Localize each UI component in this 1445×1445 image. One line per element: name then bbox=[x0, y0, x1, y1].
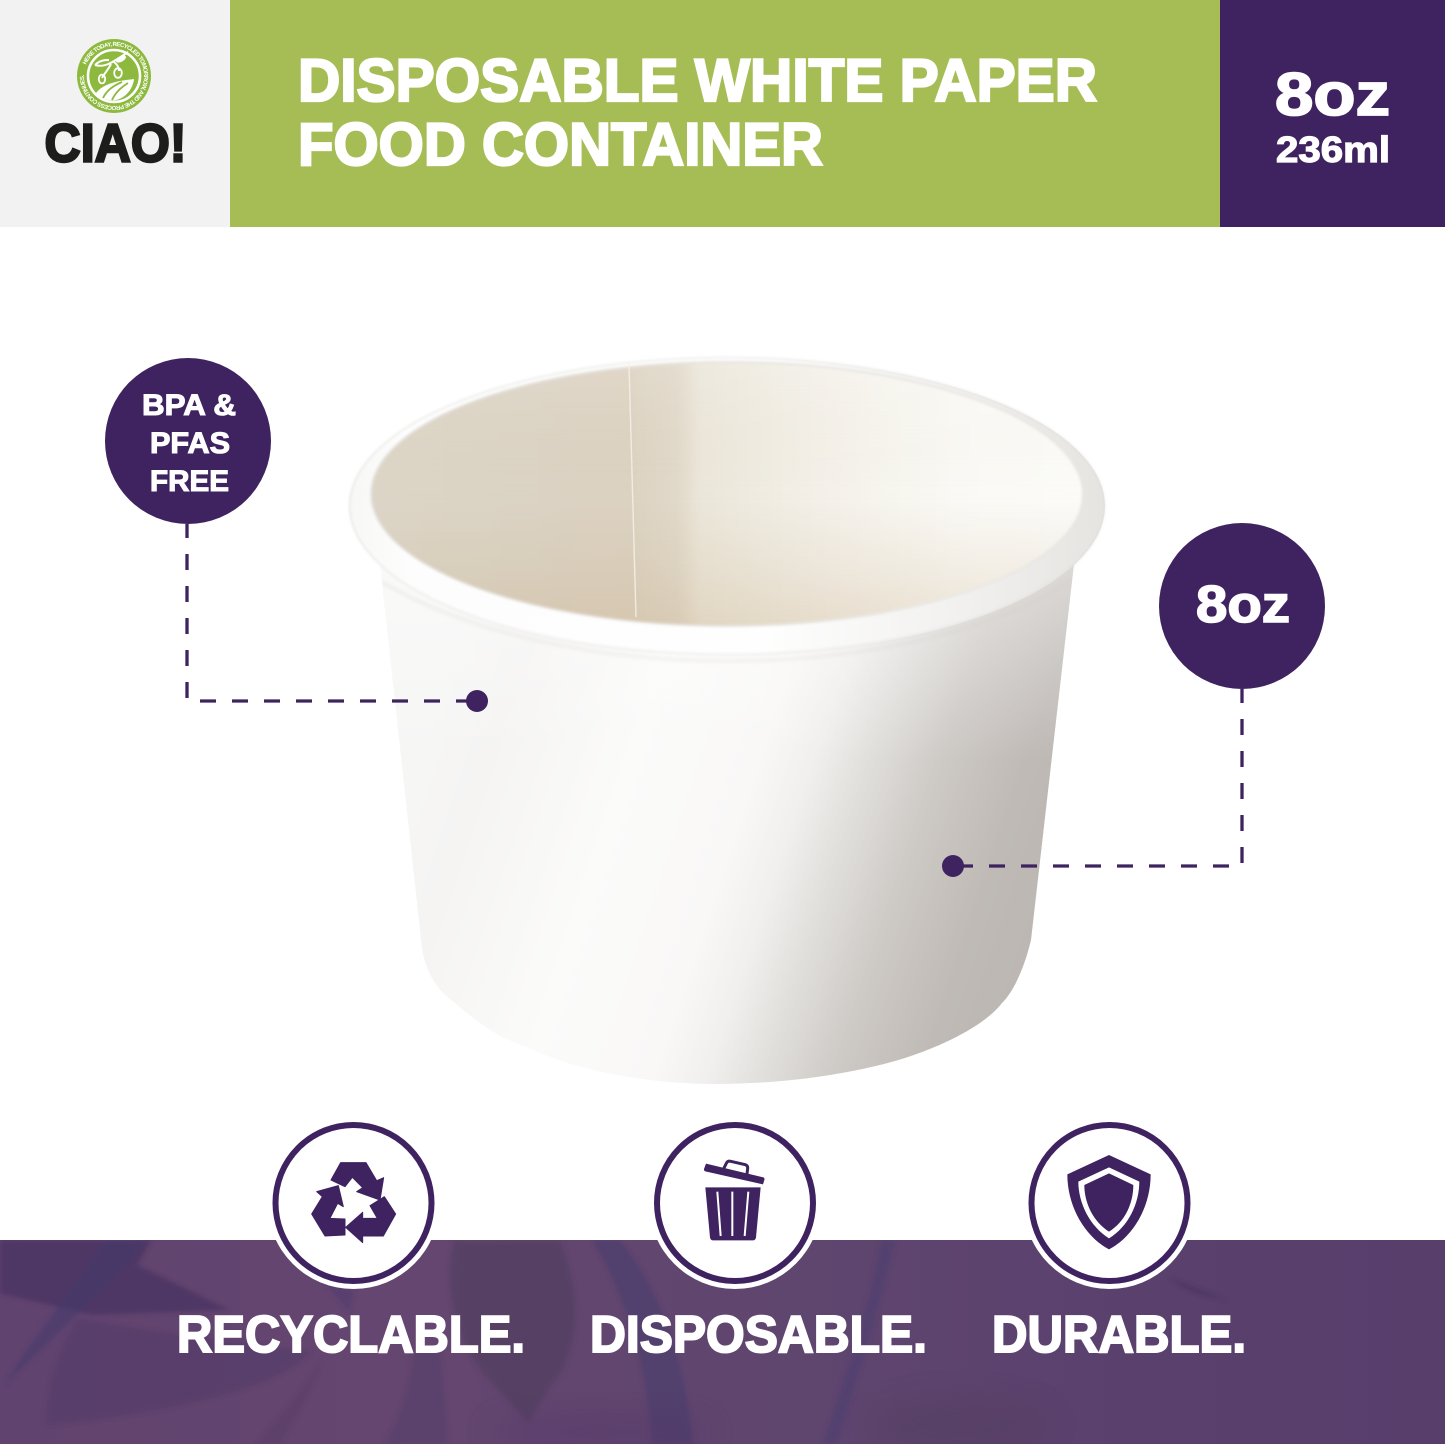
product photo: paper cup bbox=[349, 357, 1105, 1095]
label: DURABLE. bbox=[992, 1306, 1246, 1364]
feature: recyclable bbox=[177, 1117, 525, 1364]
seam bbox=[629, 364, 636, 617]
icon: recycle bbox=[312, 1163, 396, 1243]
icon ring bbox=[268, 1117, 440, 1289]
logo panel bbox=[0, 0, 230, 227]
header bar bbox=[0, 0, 1445, 227]
cup interior bbox=[370, 361, 1084, 627]
rim bbox=[349, 357, 1105, 655]
capacity bbox=[1275, 61, 1390, 170]
title: DISPOSABLE WHITE PAPER bbox=[298, 47, 1097, 114]
cup body bbox=[370, 550, 1090, 1095]
leader line bbox=[187, 524, 477, 701]
band background bbox=[0, 1240, 1445, 1444]
feature: disposable bbox=[590, 1117, 927, 1364]
callout: BPA and PFAS free bbox=[105, 358, 488, 712]
feature: durable bbox=[992, 1117, 1246, 1364]
violet tint bbox=[490, 1414, 710, 1445]
badge text: FREE bbox=[150, 465, 229, 498]
icon: shield bbox=[1067, 1155, 1151, 1249]
capacity: 236ml bbox=[1276, 129, 1390, 170]
leaf texture bbox=[0, 1240, 1228, 1445]
size panel bbox=[1220, 0, 1445, 227]
badge bbox=[105, 358, 271, 524]
badge text: 8oz bbox=[1196, 576, 1290, 634]
badge text: BPA & bbox=[142, 389, 236, 422]
shadow blob bbox=[934, 1420, 986, 1430]
title bbox=[298, 47, 1097, 178]
badge bbox=[1159, 523, 1325, 689]
label: RECYCLABLE. bbox=[177, 1306, 525, 1364]
label: DISPOSABLE. bbox=[590, 1306, 927, 1364]
icon ring bbox=[1024, 1117, 1196, 1289]
leader line bbox=[953, 689, 1242, 866]
logo badge: HERE TODAY, RECYCLED TOMORROW, AND THE PROCESS CONTINUES. bbox=[80, 42, 148, 110]
capacity: 8oz bbox=[1275, 61, 1390, 128]
logo: CIAO! bbox=[44, 39, 186, 174]
badge text bbox=[142, 389, 236, 498]
badge text: PFAS bbox=[150, 427, 230, 460]
callout: 8oz bbox=[942, 523, 1325, 877]
bottom band bbox=[0, 1240, 1445, 1445]
anchor dot bbox=[942, 855, 964, 877]
icon: trash can bbox=[704, 1161, 765, 1240]
anchor dot bbox=[466, 690, 488, 712]
icon ring bbox=[649, 1117, 821, 1289]
title panel bbox=[230, 0, 1220, 227]
brand name: CIAO! bbox=[44, 114, 186, 174]
title: FOOD CONTAINER bbox=[298, 111, 823, 178]
